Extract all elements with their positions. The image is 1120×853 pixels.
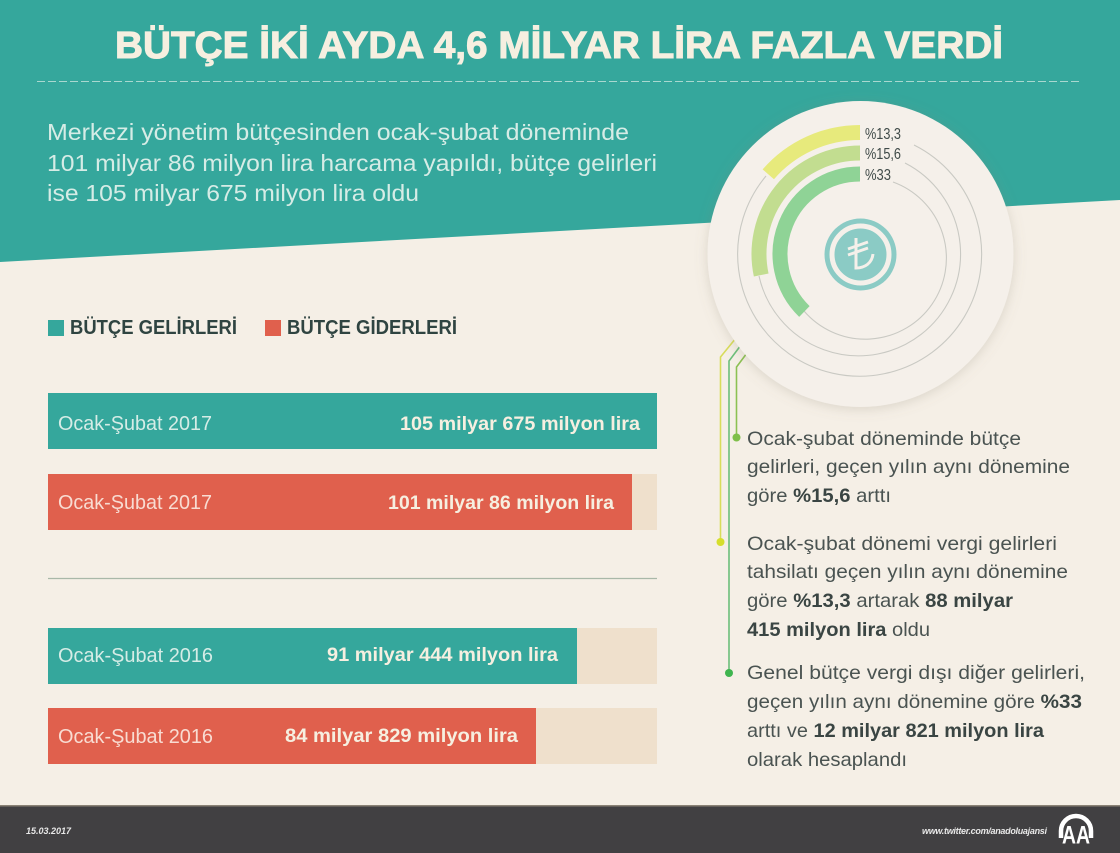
donut panel circle: [708, 101, 1014, 407]
intro text block: [47, 119, 657, 206]
bar: 2017 expenses: [48, 474, 657, 530]
right text: other revenue: Genel bütçe vergi dışı diğer gelirleri,: [747, 662, 1085, 684]
right text: other revenue: arttı ve 12 milyar 821 milyon lira: [747, 720, 1044, 742]
bar: 2017 revenue: 105 milyar 675 milyon lira: [400, 413, 640, 435]
chart labels: %15,6: [865, 146, 901, 163]
bar: 2017 expenses: 101 milyar 86 milyon lira: [388, 492, 614, 514]
radial chart: [738, 132, 982, 376]
right text: other revenue: geçen yılın aynı dönemine göre %33: [747, 691, 1082, 713]
right text: tax revenue: Ocak-şubat dönemi vergi gelirleri: [747, 533, 1057, 555]
right text: revenue: Ocak-şubat döneminde bütçe: [747, 428, 1021, 450]
icon: AA logo: AA: [1062, 822, 1090, 850]
bar: 2016 expenses: Ocak-Şubat 2016: [58, 725, 213, 748]
right text: revenue: [747, 428, 1070, 507]
teal header background: [0, 0, 1120, 262]
bar: 2016 revenue: 91 milyar 444 milyon lira: [327, 644, 558, 666]
right text: tax revenue: göre %13,3 artarak 88 milyar: [747, 590, 1013, 612]
right text: revenue: göre %15,6 arttı: [747, 485, 891, 507]
chart labels: %13,3: [865, 126, 901, 143]
right text: tax revenue: [747, 533, 1068, 641]
right text: tax revenue: tahsilatı geçen yılın aynı dönemine: [747, 561, 1068, 583]
intro text block: ise 105 milyar 675 milyon lira oldu: [47, 180, 419, 206]
chart labels: %33: [865, 167, 891, 184]
legend: BÜTÇE GELİRLERİ: [70, 316, 237, 339]
bar: 2016 revenue: Ocak-Şubat 2016: [58, 644, 213, 667]
bar: 2017 expenses: Ocak-Şubat 2017: [58, 491, 212, 514]
bar: 2017 revenue: Ocak-Şubat 2017: [58, 412, 212, 435]
right text: other revenue: [747, 662, 1085, 771]
icon: AA logo: [1061, 816, 1091, 850]
intro text block: Merkezi yönetim bütçesinden ocak-şubat döneminde: [47, 119, 629, 145]
chart labels: [865, 126, 901, 184]
footer bar: www.twitter.com/anadoluajansi: [922, 826, 1047, 836]
leader lines: [716, 338, 747, 677]
bar: 2016 revenue: [48, 628, 657, 684]
bar: 2017 revenue: [48, 393, 657, 449]
intro text block: 101 milyar 86 milyon lira harcama yapıldı, bütçe gelirleri: [47, 150, 657, 176]
bar: 2016 expenses: [48, 708, 657, 764]
right text: tax revenue: 415 milyon lira oldu: [747, 619, 930, 641]
footer bar: [0, 805, 1120, 853]
legend: [48, 316, 457, 339]
right text: revenue: gelirleri, geçen yılın aynı dönemine: [747, 456, 1070, 478]
icon: lira coin: [824, 218, 896, 290]
footer bar: 15.03.2017: [26, 826, 72, 836]
right text: other revenue: olarak hesaplandı: [747, 749, 907, 771]
legend: BÜTÇE GİDERLERİ: [287, 316, 457, 339]
title: BÜTÇE İKİ AYDA 4,6 MİLYAR LİRA FAZLA VERDİ: [115, 24, 1003, 67]
bar: 2016 expenses: 84 milyar 829 milyon lira: [285, 725, 518, 747]
